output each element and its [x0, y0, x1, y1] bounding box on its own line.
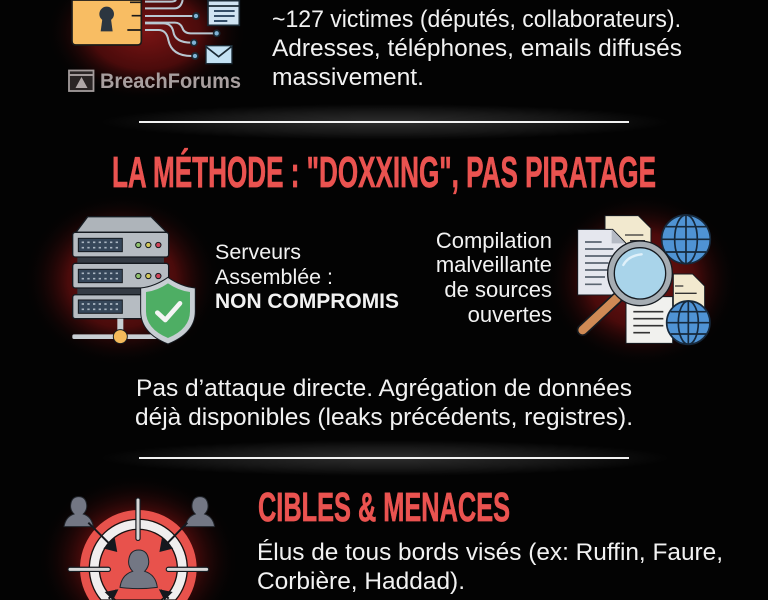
panel: breach summary	[46, 0, 682, 100]
panel: method	[24, 194, 738, 366]
text: malicious compilation: ouvertes	[468, 302, 552, 327]
text: servers not compromised: Serveurs	[215, 241, 301, 264]
text: victims and leaked data: Adresses, téléphones, emails diffusés	[272, 35, 682, 62]
text: victims and leaked data: massivement.	[272, 64, 424, 91]
text: targeted officials: Élus de tous bords visés (ex: Ruffin, Faure,	[257, 539, 723, 566]
heading: cibles et menaces: CIBLES & MENACES	[258, 484, 510, 530]
text: servers not compromised: NON COMPROMIS	[215, 290, 399, 313]
text: servers not compromised: Assemblée :	[215, 266, 333, 289]
text: malicious compilation	[436, 228, 552, 327]
icon: documents, magnifier and globes	[546, 194, 738, 366]
text: malicious compilation: malveillante	[436, 252, 552, 277]
text: victims and leaked data	[272, 6, 682, 91]
label: BreachForums: BreachForums	[100, 70, 241, 93]
icon: BreachForums window warning	[69, 70, 94, 91]
text: servers not compromised	[215, 241, 399, 313]
text: malicious compilation: Compilation	[436, 228, 552, 253]
text: targeted officials: Corbière, Haddad).	[257, 568, 465, 595]
text: victims and leaked data: ~127 victimes (députés, collaborateurs).	[272, 6, 681, 33]
icon: locked folder with data traces	[46, 0, 246, 100]
text: targeted officials	[257, 539, 723, 595]
icon: server stack with shield	[24, 194, 220, 366]
icon: target with person and arrows	[38, 475, 238, 600]
text: no direct attack: déjà disponibles (leaks précédents, registres).	[135, 404, 633, 431]
text: no direct attack	[135, 375, 633, 431]
text: no direct attack: Pas d’attaque directe. Agrégation de données	[136, 375, 632, 402]
text: malicious compilation: de sources	[444, 277, 552, 302]
panel: targets and threats	[38, 475, 723, 600]
